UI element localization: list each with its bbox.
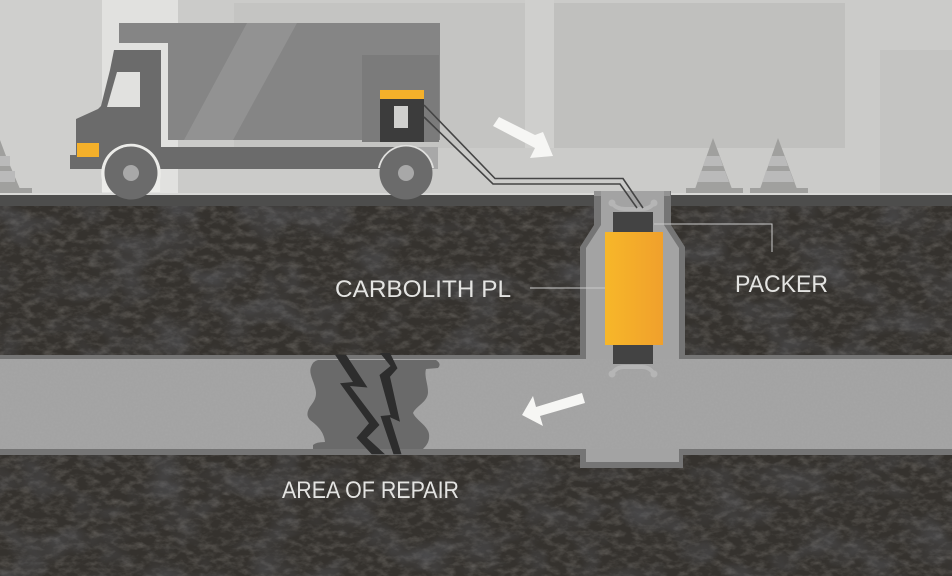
traffic cone: right [750,138,808,193]
cab window [107,72,140,107]
label: carbolith pl: CARBOLITH PL [335,276,511,303]
truck box highlight [184,23,297,140]
top end cap [612,203,654,209]
carbolith sleeve [605,232,663,345]
rear equipment bay [362,55,439,142]
main pipe walls [0,355,952,455]
road surface [0,195,952,206]
truck chassis [160,147,438,169]
top packer body [613,212,653,232]
leader line: carbolith [530,287,605,289]
arrow: along pipe [522,393,585,426]
traffic cone: middle [686,138,743,193]
bottom packer body [613,345,653,364]
label: area of repair: AREA OF REPAIR [282,477,459,504]
pipe crack [335,353,402,454]
hoses [424,105,643,208]
bottom end cap [612,367,654,374]
top packer bolts [608,200,658,206]
manhole interior [586,191,679,462]
truck [70,23,440,200]
bottom packer bolts [608,370,658,378]
label: packer: PACKER [735,271,828,298]
pump unit [380,90,424,142]
soil [0,195,952,576]
truck box [119,23,440,140]
packer assembly [605,200,663,378]
traffic cone: left [0,140,32,193]
rear wheel [378,145,434,200]
manhole shaft walls [580,191,685,468]
headlight [77,143,99,157]
area of repair patch [307,360,440,449]
pipe and manhole [0,191,952,468]
arrow: down to manhole [493,117,553,158]
leader line: packer [654,224,772,252]
main pipe interior [0,359,952,449]
street background [0,0,952,196]
truck cab [70,50,161,169]
front wheel [101,144,161,200]
